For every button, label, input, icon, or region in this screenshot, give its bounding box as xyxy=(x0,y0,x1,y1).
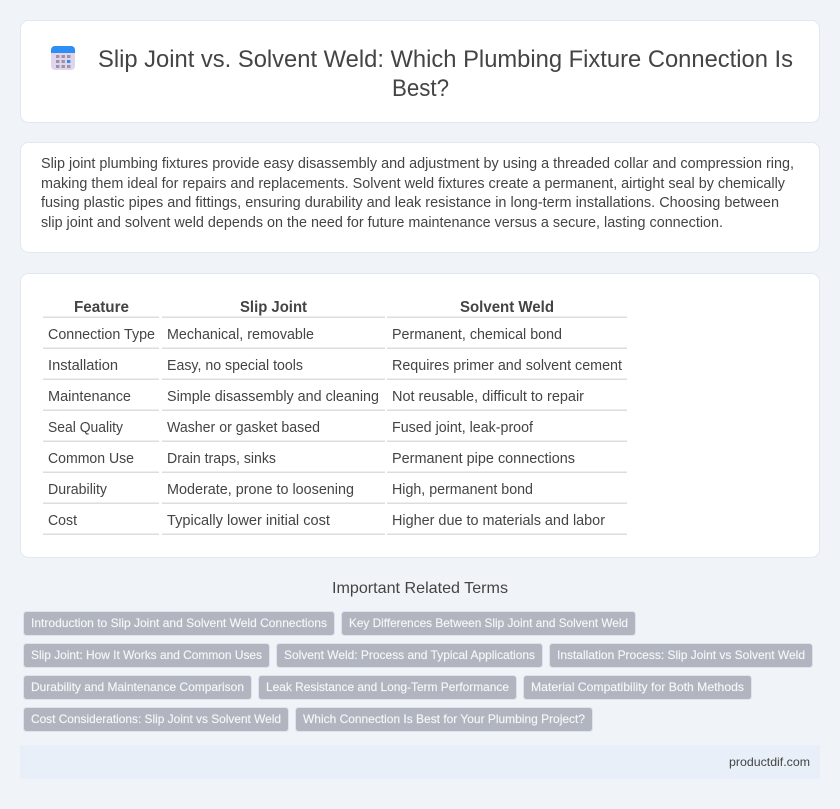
panel: introduction text: Slip joint plumbing fixtures provide easy disassembly and adjustment by using a threaded collar and compression ring, xyxy=(41,156,794,172)
row: connection type: Mechanical, removable xyxy=(167,327,314,343)
row: durability xyxy=(48,482,533,498)
row: cost: Typically lower initial cost xyxy=(167,513,330,529)
table header row xyxy=(74,299,554,316)
row: installation: Requires primer and solvent cement xyxy=(392,358,622,374)
row: common use: Common Use xyxy=(48,451,134,467)
related term tags: Leak Resistance and Long-Term Performance xyxy=(266,680,509,694)
panel: introduction text xyxy=(20,142,820,252)
row: common use: Permanent pipe connections xyxy=(392,451,575,467)
icon: calendar xyxy=(51,46,75,70)
related term tags: Cost Considerations: Slip Joint vs Solvent Weld xyxy=(31,712,281,726)
row: installation xyxy=(48,358,622,374)
row: maintenance xyxy=(48,389,584,405)
related term tags xyxy=(24,612,812,732)
row: cost: Cost xyxy=(48,513,77,529)
row: durability: Durability xyxy=(48,482,108,498)
table header row: Slip Joint xyxy=(240,299,308,316)
related term tags: Durability and Maintenance Comparison xyxy=(31,680,244,694)
row: durability: Moderate, prone to loosening xyxy=(167,482,354,498)
row: maintenance: Not reusable, difficult to repair xyxy=(392,389,584,405)
related term tags: Which Connection Is Best for Your Plumbing Project? xyxy=(303,712,585,726)
title xyxy=(98,46,793,102)
row: connection type xyxy=(48,327,562,343)
row: durability: High, permanent bond xyxy=(392,482,533,498)
panel: title header xyxy=(20,20,820,122)
row: seal quality: Seal Quality xyxy=(48,420,124,436)
footer: productdif.com xyxy=(729,755,810,769)
panel: introduction text: making them ideal for repairs and replacements. Solvent weld fixtures create a permanent, airtight seal by chemically xyxy=(41,176,786,192)
row: maintenance: Simple disassembly and cleaning xyxy=(167,389,379,405)
related term tags: Installation Process: Slip Joint vs Solvent Weld xyxy=(557,648,805,662)
related term tags: Slip Joint: How It Works and Common Uses xyxy=(31,648,262,662)
panel: introduction text: slip joint and solvent weld depends on the need for future maintenance versus a secure, lasting connection. xyxy=(41,215,723,231)
row: cost xyxy=(48,513,605,529)
row: common use xyxy=(48,451,575,467)
title: Best? xyxy=(392,75,449,102)
row: seal quality: Fused joint, leak-proof xyxy=(392,420,534,436)
row: seal quality: Washer or gasket based xyxy=(167,420,320,436)
related term tags: Key Differences Between Slip Joint and Solvent Weld xyxy=(349,616,628,630)
row: installation: Easy, no special tools xyxy=(167,358,303,374)
row: maintenance: Maintenance xyxy=(48,389,131,405)
footer xyxy=(20,745,820,779)
related term tags: Introduction to Slip Joint and Solvent Weld Connections xyxy=(31,616,327,630)
table header row: Solvent Weld xyxy=(460,299,554,316)
heading: important related terms: Important Related Terms xyxy=(332,580,508,597)
row: seal quality xyxy=(48,420,534,436)
row: connection type: Permanent, chemical bond xyxy=(392,327,562,343)
table header row: Feature xyxy=(74,299,129,316)
related term tags: Material Compatibility for Both Methods xyxy=(531,680,744,694)
panel: introduction text: fusing plastic pipes and fittings, ensuring durability and leak resistance in long-term installations. Choosing between xyxy=(41,195,779,211)
row: cost: Higher due to materials and labor xyxy=(392,513,605,529)
related term tags: Solvent Weld: Process and Typical Applications xyxy=(284,648,535,662)
panel: comparison table xyxy=(20,274,820,558)
title: Slip Joint vs. Solvent Weld: Which Plumbing Fixture Connection Is xyxy=(98,46,793,73)
row: connection type: Connection Type xyxy=(48,327,155,343)
row: common use: Drain traps, sinks xyxy=(167,451,276,467)
row: installation: Installation xyxy=(48,358,118,374)
